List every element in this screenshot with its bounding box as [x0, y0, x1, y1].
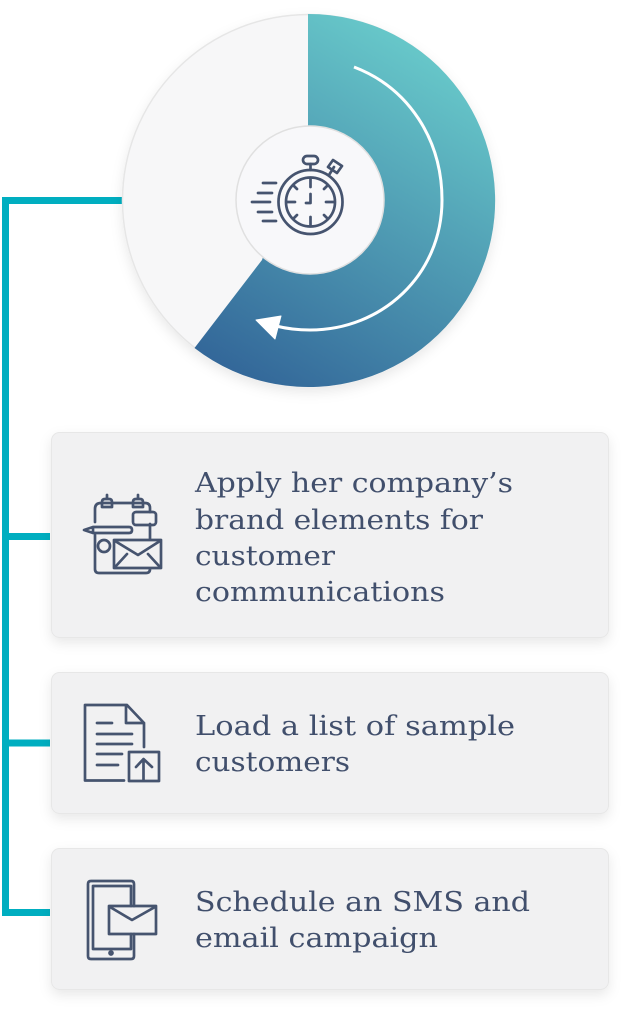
- card 2: [52, 672, 608, 814]
- card background: [52, 672, 608, 814]
- icon: phone and envelope: [88, 881, 156, 959]
- card 2 text: customers: [195, 747, 350, 778]
- icon: document upload: [85, 705, 159, 781]
- card 3 text: [195, 887, 530, 954]
- card 2 text: [195, 711, 515, 778]
- card 1 text: brand elements for: [195, 505, 483, 536]
- circular arrow: [256, 67, 442, 339]
- card 1: [52, 432, 608, 638]
- center circle: [236, 126, 384, 274]
- card 1 text: [194, 468, 513, 608]
- donut chart: [122, 14, 495, 387]
- card 3 text: email campaign: [195, 923, 438, 954]
- card 1 text: Apply her company’s: [194, 468, 513, 499]
- card 1 text: communications: [195, 577, 445, 608]
- card 3: [52, 848, 608, 990]
- connector line: [6, 200, 122, 912]
- card 2 text: Load a list of sample: [195, 711, 515, 742]
- card background: [52, 848, 608, 990]
- card 3 text: Schedule an SMS and: [195, 887, 530, 918]
- card background: [52, 432, 608, 638]
- gradient wedge: [194, 14, 495, 387]
- card 1 text: customer: [195, 541, 335, 572]
- icon: calendar and envelope: [84, 495, 161, 573]
- icon: stopwatch: [252, 156, 342, 234]
- chart background circle: [122, 14, 494, 386]
